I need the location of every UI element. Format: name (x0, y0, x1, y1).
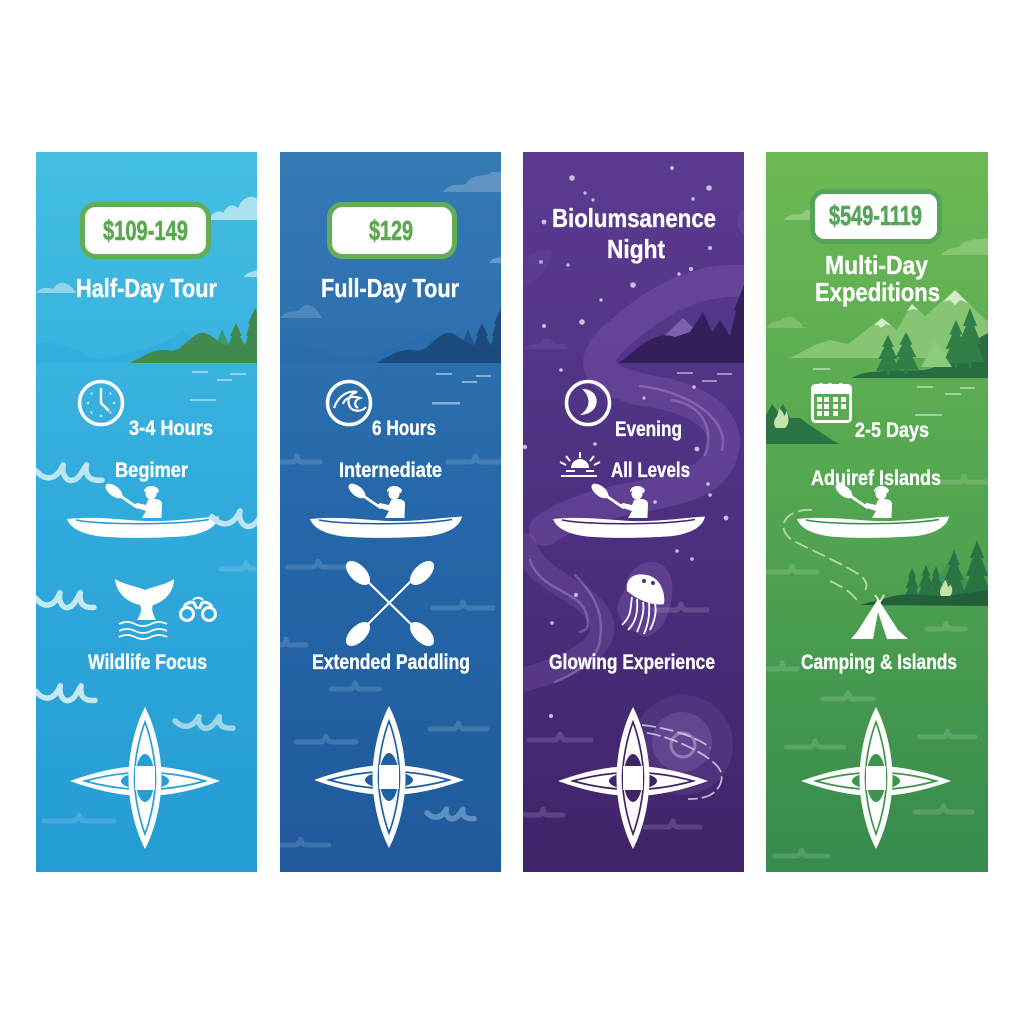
icon: calendar (812, 383, 851, 422)
ripple (940, 476, 988, 482)
icon: wave badge (328, 382, 370, 424)
label: Extended Paddling (312, 651, 470, 674)
wave (212, 511, 280, 526)
price badge (330, 204, 454, 256)
water ripples (190, 371, 246, 401)
ripples (266, 561, 493, 845)
price badge: $109-149 (103, 215, 188, 246)
motion trails (642, 725, 722, 799)
label: Camping & Islands (801, 651, 957, 674)
icon: kayak top view (801, 707, 951, 849)
distant peak (660, 318, 706, 340)
aurora swirl (523, 281, 752, 682)
skill level: Begimer (115, 459, 188, 482)
icon: kayak top view (314, 706, 464, 848)
heading (815, 250, 940, 307)
wave (36, 593, 94, 608)
heading: Half-Day Tour (76, 273, 217, 303)
panel: full-day tour (266, 152, 511, 872)
water ripples (677, 372, 732, 382)
stars (523, 166, 728, 718)
label: Glowing Experience (549, 651, 715, 674)
campfire island (766, 404, 839, 444)
jellyfish glow (618, 562, 672, 636)
skill level: All Levels (611, 459, 690, 482)
icon: jellyfish (622, 574, 664, 634)
heading: Night (607, 234, 665, 264)
wave (175, 716, 233, 728)
icon: kayak top view (558, 707, 708, 849)
label: Wildlife Focus (88, 651, 207, 674)
ripples (767, 566, 975, 856)
icon: tent (851, 595, 908, 639)
wave (36, 686, 95, 701)
icon: crossed paddles (346, 561, 434, 646)
heading (552, 203, 716, 264)
icon: sunset (560, 452, 600, 476)
price badge (82, 204, 208, 256)
paddle trail (783, 510, 866, 604)
island with trees (376, 308, 511, 363)
small tent (921, 341, 952, 367)
price badge: $549-1119 (829, 200, 922, 231)
icon: whale tail (115, 579, 174, 639)
heading: Multi-Day (825, 250, 928, 280)
panel: bioluminescence night (523, 152, 752, 872)
island (852, 333, 988, 378)
water ripples (813, 368, 975, 416)
price badge: $129 (369, 215, 413, 246)
panel: half-day tour (36, 152, 280, 872)
forest with campfire (860, 540, 991, 606)
icon: kayaker (797, 481, 949, 538)
island with trees (130, 308, 265, 363)
wave (36, 465, 102, 480)
distant hills (280, 330, 501, 363)
icon: moon (566, 382, 610, 424)
distant mountains (790, 290, 988, 358)
duration: 6 Hours (372, 417, 436, 440)
skill level: Internediate (339, 459, 442, 482)
heading: Full-Day Tour (321, 273, 459, 303)
heading: Biolumsanence (552, 203, 716, 233)
price badge (812, 192, 940, 242)
heading: Expeditions (815, 277, 940, 307)
icon: kayaker (310, 481, 462, 538)
panel: multi-day expeditions (766, 152, 991, 872)
glow swirl (633, 695, 733, 795)
focus label: Aduiref Islands (811, 467, 941, 490)
clouds (766, 210, 988, 328)
water ripples (432, 373, 491, 404)
ripple (44, 815, 114, 821)
icon: binoculars (180, 598, 216, 620)
faint clouds (523, 210, 744, 349)
ripples (523, 604, 707, 827)
clouds (280, 172, 501, 318)
ripple (221, 563, 271, 569)
distant hills (36, 330, 257, 363)
ripples (274, 456, 503, 462)
icon: kayaker (553, 481, 705, 538)
duration: 3-4 Hours (129, 417, 213, 440)
island with trees (618, 285, 750, 363)
icon: kayak top view (70, 707, 220, 849)
clouds (36, 197, 260, 293)
trees (876, 308, 984, 375)
time of day: Evening (615, 418, 682, 441)
icon: kayaker (67, 481, 219, 538)
wave (427, 809, 474, 819)
icon: clock (80, 382, 122, 424)
duration: 2-5 Days (855, 419, 929, 442)
